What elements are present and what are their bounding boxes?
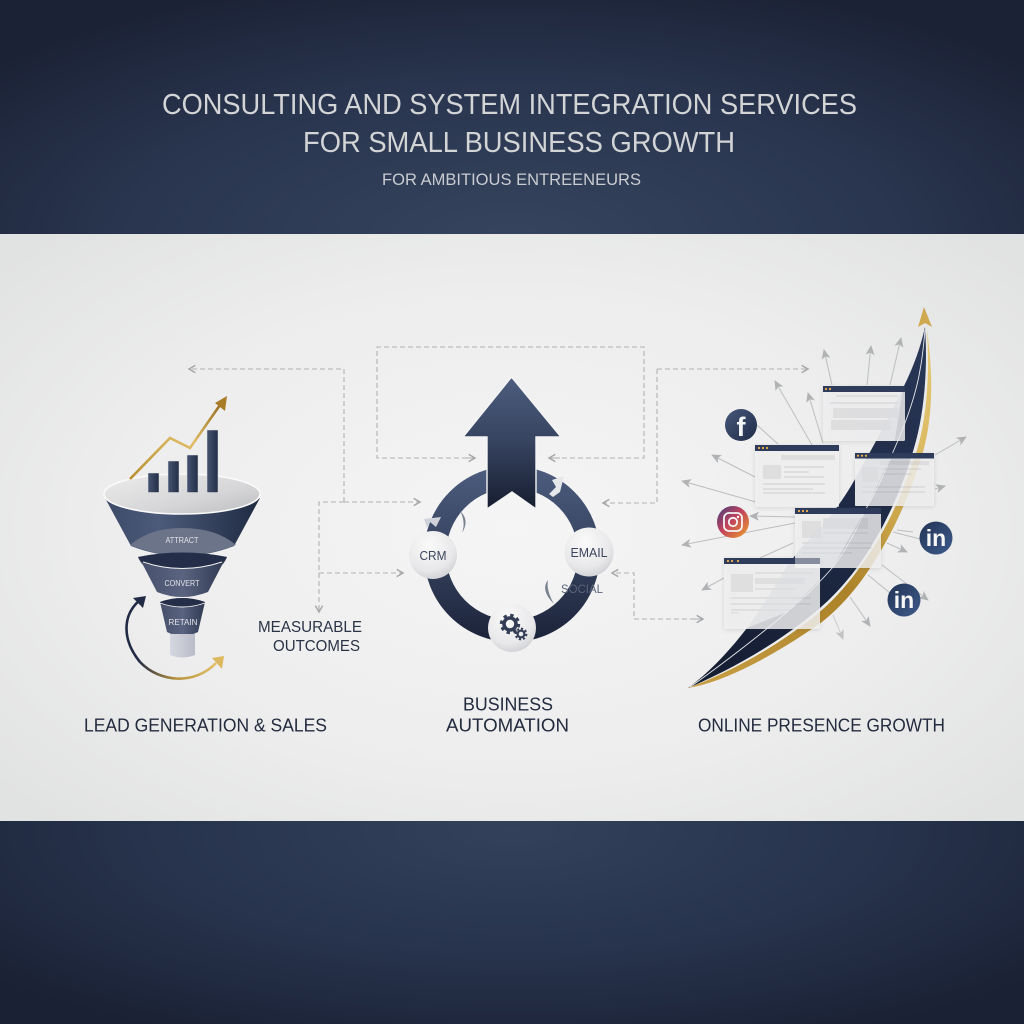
label: measurable outcomes: MEASURABLE	[258, 619, 362, 636]
email node: EMAIL	[570, 545, 608, 560]
label: measurable outcomes	[258, 619, 362, 655]
gold cycle arrow	[140, 656, 224, 679]
header band	[0, 0, 1024, 234]
funnel rim	[104, 474, 260, 514]
title: CONSULTING AND SYSTEM INTEGRATION SERVICES	[162, 89, 857, 121]
funnel: lead generation	[104, 396, 260, 679]
radiating grey arrows	[682, 338, 966, 639]
main panel background	[0, 234, 1024, 821]
funnel tube	[170, 634, 195, 658]
ring arrow glyphs	[424, 476, 564, 604]
icon: linkedin upper: in	[926, 525, 946, 551]
icon: linkedin upper	[920, 522, 952, 554]
swoosh highlight lines	[690, 330, 925, 687]
icon: gears	[501, 615, 526, 639]
funnel middle section	[138, 552, 227, 597]
funnel labels: RETAIN	[168, 617, 198, 627]
section labels	[84, 694, 945, 736]
icon: facebook: f	[736, 412, 746, 442]
online presence label: ONLINE PRESENCE GROWTH	[698, 714, 945, 736]
attract highlight band	[130, 528, 236, 556]
icon: instagram	[717, 506, 749, 538]
big up arrow	[463, 377, 561, 509]
CRM node	[409, 531, 457, 579]
label: measurable outcomes: OUTCOMES	[273, 638, 360, 655]
browser window 2	[755, 445, 839, 507]
swoosh dark body	[688, 327, 926, 688]
browser window 4	[795, 508, 881, 568]
funnel lower section	[160, 598, 205, 636]
icon: linkedin lower: in	[894, 587, 914, 613]
lead generation label: LEAD GENERATION & SALES	[84, 714, 327, 736]
funnel labels: ATTRACT	[166, 535, 199, 545]
title	[162, 89, 857, 159]
icon: linkedin lower	[888, 584, 920, 616]
swoosh gold edge	[688, 330, 931, 688]
subtitle: FOR AMBITIOUS ENTREENEURS	[382, 170, 641, 189]
browser window 1	[823, 386, 905, 441]
gold growth arrow	[130, 396, 227, 479]
ring	[435, 477, 589, 631]
social label: SOCIAL	[561, 584, 604, 596]
browser window 3	[855, 453, 934, 506]
funnel top section	[105, 498, 260, 556]
dashed connector lines	[189, 347, 808, 619]
title: FOR SMALL BUSINESS GROWTH	[303, 127, 735, 159]
gear node	[488, 604, 536, 652]
footer band	[0, 821, 1024, 1024]
growth swoosh	[688, 307, 932, 688]
browser window 5	[724, 558, 820, 629]
funnel labels: CONVERT	[164, 578, 200, 588]
automation loop	[409, 377, 614, 652]
bar chart	[148, 430, 218, 492]
dark cycle arrow	[126, 596, 146, 662]
business automation label: AUTOMATION	[446, 714, 569, 736]
email node	[564, 528, 614, 576]
business automation label	[446, 694, 569, 736]
business automation label: BUSINESS	[463, 694, 553, 714]
gold arrow tip	[918, 307, 932, 327]
funnel labels	[164, 535, 200, 627]
CRM node: CRM	[420, 548, 446, 563]
glass sheen over windows	[747, 388, 903, 628]
icon: facebook	[725, 409, 757, 442]
